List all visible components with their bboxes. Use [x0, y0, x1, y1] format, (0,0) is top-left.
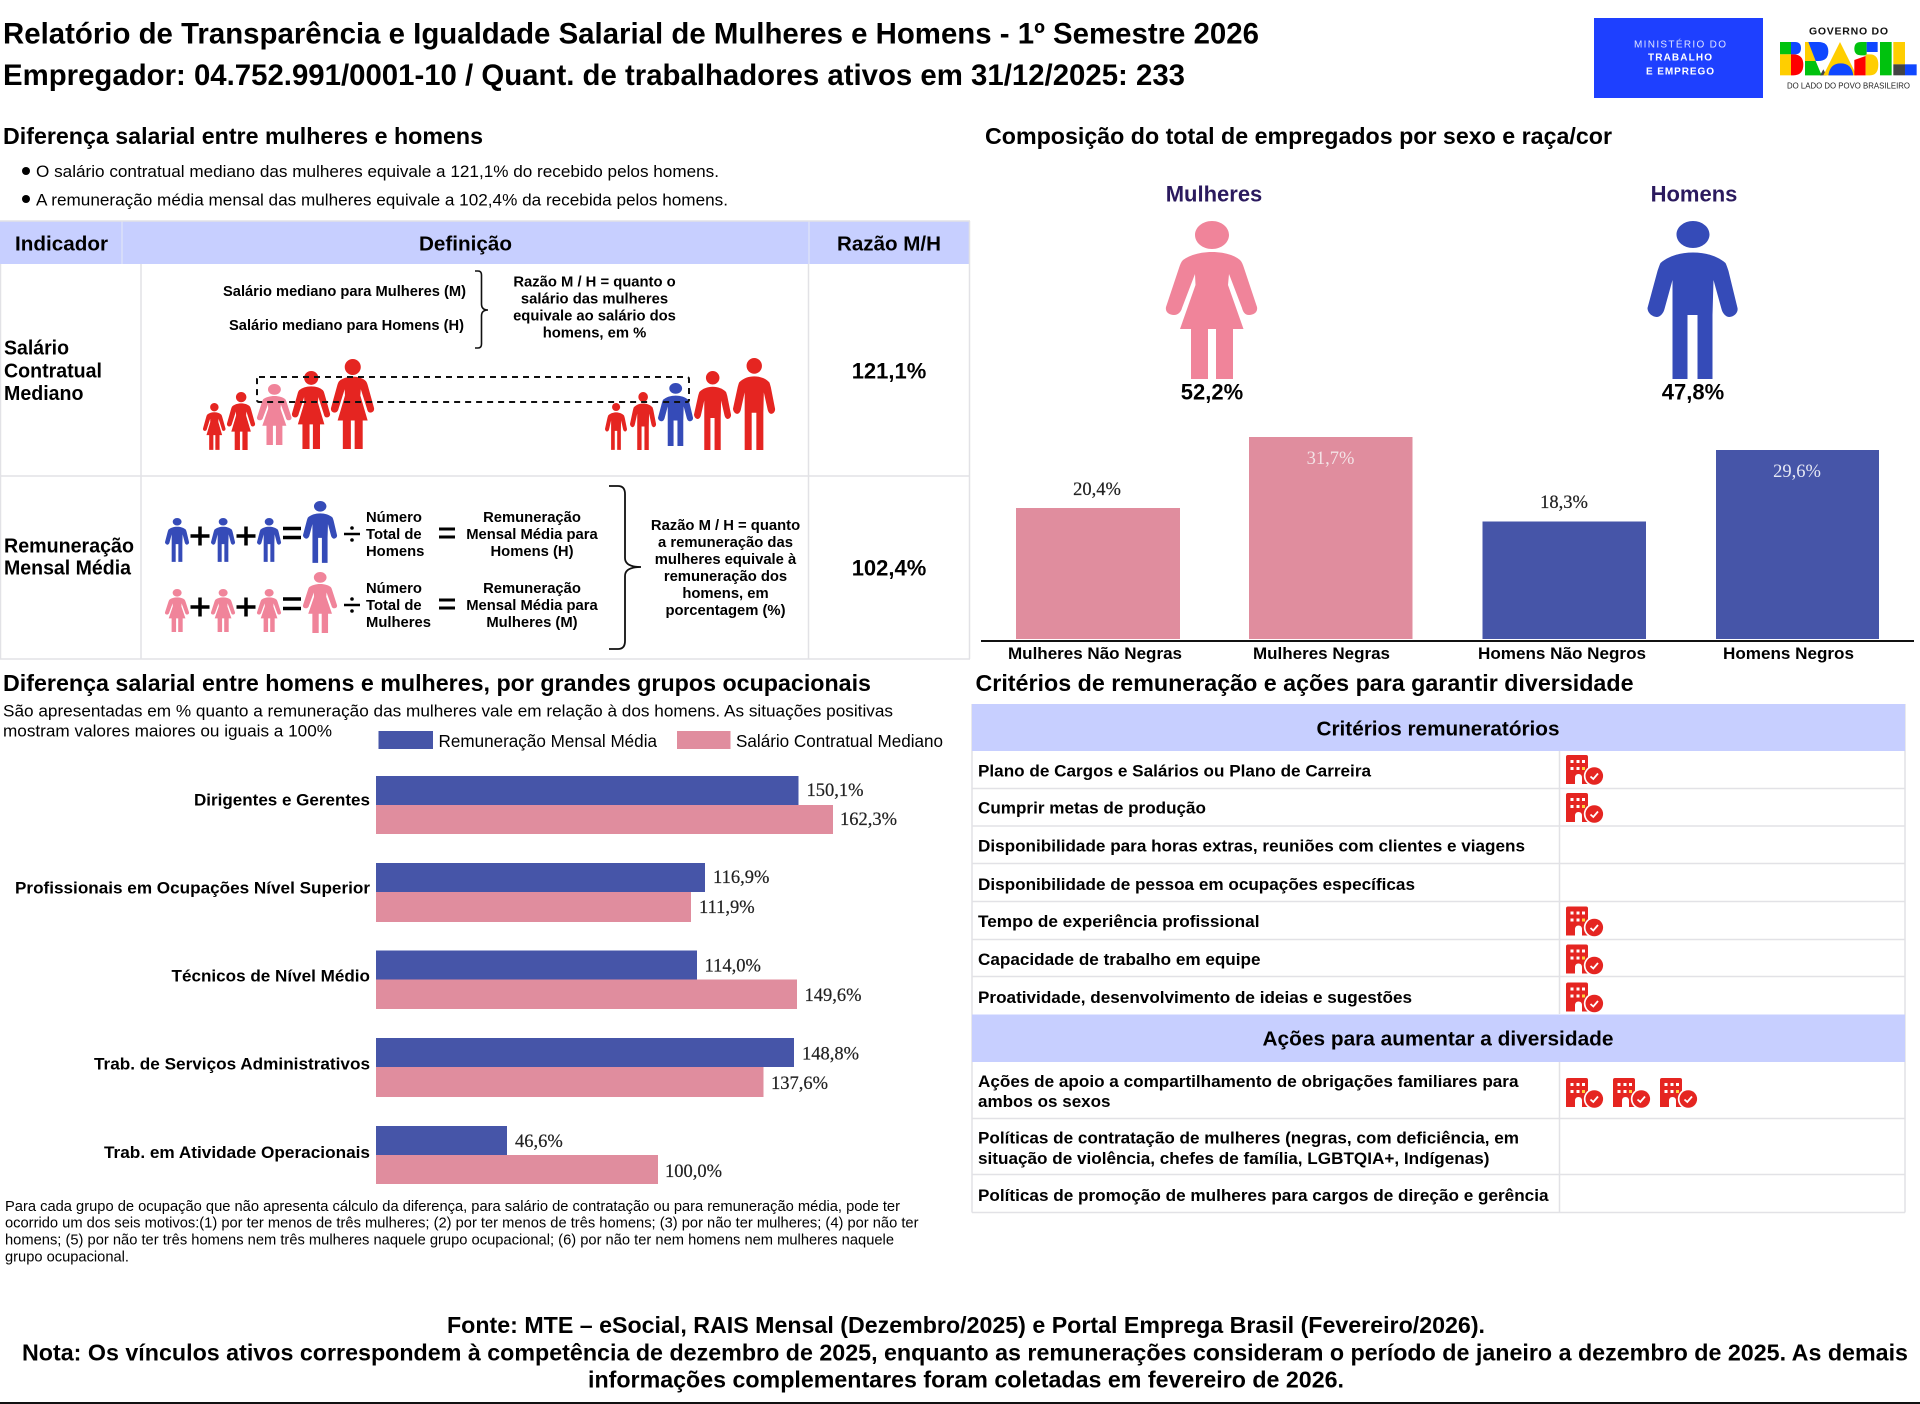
bar chart: sexo e raça/cor: 29,6%: [1773, 462, 1821, 482]
icons: homens por salário: [605, 358, 775, 450]
row: remuneração mensal média: 102,4%: [852, 556, 926, 580]
bullet list: O salário contratual mediano das mulheres equivale a 121,1% do recebido pelos homens.: [36, 162, 719, 181]
row: salário contratual mediano: [4, 271, 926, 450]
row: salário contratual mediano: Contratual: [4, 360, 102, 382]
logo: Governo do Brasil: GOVERNO DO: [1809, 26, 1888, 38]
formula: homens: Homens (H): [490, 544, 574, 560]
rows: ações: ambos os sexos: [978, 1092, 1110, 1111]
grupo: atividade operacional: 46,6%: [515, 1132, 563, 1152]
bar chart: sexo e raça/cor: 20,4%: [1073, 480, 1121, 500]
row: salário contratual mediano: Salário mediano para Homens (H): [229, 318, 464, 334]
row: salário contratual mediano: Salário: [4, 336, 69, 360]
rows: critérios: Disponibilidade para horas extras, reuniões com clientes e viagens: [978, 836, 1525, 856]
grupo: profissionais: 116,9%: [713, 868, 769, 888]
row: remuneração mensal média: [4, 486, 926, 649]
formula: homens: Remuneração: [483, 510, 581, 526]
formula: homens: [165, 501, 599, 563]
grupo: atividade operacional: 100,0%: [665, 1162, 722, 1182]
rows: critérios: [978, 762, 1525, 1007]
grupo: técnicos: 149,6%: [804, 986, 862, 1006]
rows: ações: situação de violência, chefes de família, LGBTQIA+, Indígenas): [978, 1149, 1490, 1168]
panel: homens total: [1648, 182, 1738, 404]
bar chart: sexo e raça/cor: 18,3%: [1540, 493, 1588, 513]
row: remuneração mensal média: porcentagem (%): [665, 603, 786, 619]
footnote: grupo ocupacional.: [5, 1248, 129, 1266]
logo: Ministério do Trabalho e Emprego: MINISTÉRIO DO: [1634, 38, 1726, 50]
heading: composição: Composição do total de empregados por sexo e raça/cor: [985, 123, 1612, 149]
text: explicação do gráfico: [3, 702, 893, 740]
panel: tabela de indicadores: [0, 221, 970, 659]
icons: ações: [1566, 1078, 1699, 1110]
grupo: profissionais: [15, 863, 769, 922]
rows: critérios: Plano de Cargos e Salários ou Plano de Carreira: [978, 762, 1372, 780]
rows: ações: Políticas de contratação de mulheres (negras, com deficiência, em: [978, 1128, 1519, 1148]
grupo: serviços administrativos: Trab. de Serviços Administrativos: [94, 1054, 370, 1074]
icons: critérios: [1566, 755, 1605, 1014]
grupo: atividade operacional: Trab. em Atividade Operacionais: [104, 1143, 370, 1162]
grupo: profissionais: 111,9%: [699, 898, 755, 918]
header: ações: Ações para aumentar a diversidade: [1262, 1028, 1614, 1050]
rows: critérios: Capacidade de trabalho em equipe: [978, 950, 1260, 969]
table header: Definição: [419, 232, 512, 256]
formula: mulheres: Mensal Média para: [466, 598, 599, 614]
formula: homens: Mensal Média para: [466, 527, 599, 543]
grupo: dirigentes: Dirigentes e Gerentes: [194, 790, 370, 810]
table header: [0, 221, 969, 264]
formula: mulheres: Total de: [366, 598, 422, 614]
title: Relatório de Transparência e Igualdade Salarial de Mulheres e Homens - 1º Semestre 2026: [3, 18, 1259, 50]
footer: fonte e nota: Nota: Os vínculos ativos correspondem à competência de dezembro de 2025, enquanto as remunerações consideram o período de janeiro a dezembro de 2025. As demais: [22, 1340, 1908, 1366]
formula: homens: Número: [366, 510, 422, 526]
title: Empregador: 04.752.991/0001-10 / Quant. de trabalhadores ativos em 31/12/2025: 233: [3, 59, 1185, 92]
bar chart: sexo e raça/cor: Homens Negros: [1723, 644, 1854, 663]
heading: diferença por grupos ocupacionais: Diferença salarial entre homens e mulheres, por grandes grupos ocupacionais: [3, 670, 871, 696]
rows: critérios: Proatividade, desenvolvimento de ideias e sugestões: [978, 988, 1412, 1007]
logo: Ministério do Trabalho e Emprego: [1594, 18, 1763, 98]
panel: mulheres total: 52,2%: [1181, 380, 1243, 404]
row: remuneração mensal média: Razão M / H = quanto: [651, 518, 800, 534]
row: salário contratual mediano: Razão M / H = quanto o: [513, 274, 676, 290]
row: remuneração mensal média: Remuneração: [4, 534, 134, 558]
row: remuneração mensal média: homens, em: [682, 586, 769, 602]
formula: mulheres: Remuneração: [483, 581, 581, 597]
header: critérios remuneratórios: Critérios remuneratórios: [1316, 718, 1560, 740]
rows: critérios: Cumprir metas de produção: [978, 798, 1206, 818]
text: explicação do gráfico: São apresentadas em % quanto a remuneração das mulheres vale em relação à dos homens. As situações positivas: [3, 702, 893, 720]
header: critérios remuneratórios: [972, 704, 1905, 751]
formula: mulheres: Mulheres (M): [486, 615, 578, 631]
logo: Ministério do Trabalho e Emprego: TRABALHO: [1648, 52, 1712, 64]
bar chart: sexo e raça/cor: Homens Não Negros: [1478, 644, 1646, 663]
row: remuneração mensal média: mulheres equivale à: [655, 552, 797, 568]
rows: ações: [978, 1072, 1549, 1205]
panel: homens total: 47,8%: [1662, 380, 1724, 404]
logo: Governo do Brasil: DO LADO DO POVO BRASILEIRO: [1787, 80, 1910, 90]
table header: Razão M/H: [837, 232, 941, 256]
footnote: ocorrido um dos seis motivos:(1) por ter menos de três mulheres; (2) por ter menos de três homens; (3) por não ter mulheres; (4) por não ter: [5, 1214, 918, 1232]
grupo: profissionais: Profissionais em Ocupações Nível Superior: [15, 878, 370, 898]
heading: critérios: Critérios de remuneração e ações para garantir diversidade: [976, 670, 1634, 696]
rows: critérios: Disponibilidade de pessoa em ocupações específicas: [978, 875, 1415, 894]
row: salário contratual mediano: 121,1%: [852, 358, 926, 384]
panel: mulheres total: [1166, 182, 1262, 404]
panel: mulheres total: Mulheres: [1166, 182, 1262, 206]
bar chart: grupos ocupacionais: [15, 776, 897, 1184]
text: explicação do gráfico: mostram valores maiores ou iguais a 100%: [3, 722, 332, 740]
footer: fonte e nota: informações complementares foram coletadas em fevereiro de 2026.: [588, 1366, 1344, 1392]
rows: ações: Ações de apoio a compartilhamento de obrigações familiares para: [978, 1072, 1519, 1091]
footnote: [5, 1198, 918, 1266]
footnote: Para cada grupo de ocupação que não apresenta cálculo da diferença, para salário de contratação ou para remuneração média, pode ter: [5, 1198, 900, 1215]
row: remuneração mensal média: a remuneração das: [658, 535, 793, 551]
title: [3, 18, 1259, 92]
formula: homens: Homens: [366, 544, 424, 560]
grupo: dirigentes: [194, 776, 897, 834]
grupo: técnicos: Técnicos de Nível Médio: [172, 966, 370, 986]
icons: mulheres por salário: [203, 359, 374, 450]
bullet list: A remuneração média mensal das mulheres equivale a 102,4% da recebida pelos homens.: [36, 190, 728, 210]
bar chart: sexo e raça/cor: Mulheres Não Negras: [1008, 644, 1182, 663]
logo: Ministério do Trabalho e Emprego: E EMPREGO: [1646, 66, 1714, 78]
footnote: homens; (5) por não ter três homens nem três mulheres naquele grupo ocupacional; (6) por não ter nem homens nem mulheres naquele: [5, 1232, 894, 1248]
bar chart: sexo e raça/cor: Mulheres Negras: [1253, 644, 1390, 663]
grupo: atividade operacional: [104, 1126, 722, 1184]
heading: diferença salarial: Diferença salarial entre mulheres e homens: [3, 123, 483, 149]
legend: [378, 731, 943, 751]
grupo: técnicos: [172, 950, 862, 1009]
grupo: serviços administrativos: 148,8%: [802, 1044, 859, 1064]
formula: mulheres: Mulheres: [366, 615, 431, 631]
rows: ações: Políticas de promoção de mulheres para cargos de direção e gerência: [978, 1186, 1549, 1205]
legend: Salário Contratual Mediano: [736, 731, 943, 751]
footer: fonte e nota: [22, 1312, 1908, 1392]
row: salário contratual mediano: Salário mediano para Mulheres (M): [223, 284, 466, 300]
panel: critérios e ações: [972, 704, 1905, 1212]
row: salário contratual mediano: Mediano: [4, 382, 84, 405]
grupo: dirigentes: 150,1%: [806, 781, 864, 801]
header: ações: [972, 1014, 1905, 1062]
grupo: técnicos: 114,0%: [704, 956, 761, 976]
bullet list: [22, 162, 728, 210]
bar chart: sexo e raça/cor: [981, 437, 1914, 663]
grupo: dirigentes: 162,3%: [840, 810, 897, 830]
table header: Indicador: [15, 232, 108, 256]
formula: mulheres: Número: [366, 581, 422, 597]
row: salário contratual mediano: equivale ao salário dos: [513, 308, 676, 324]
logo: Governo do Brasil: [1780, 26, 1917, 90]
bar chart: sexo e raça/cor: 31,7%: [1307, 449, 1354, 469]
rows: critérios: Tempo de experiência profissional: [978, 912, 1260, 931]
row: remuneração mensal média: Mensal Média: [4, 556, 132, 580]
row: salário contratual mediano: homens, em %: [543, 326, 646, 342]
legend: Remuneração Mensal Média: [438, 731, 657, 751]
formula: homens: Total de: [366, 527, 422, 543]
row: remuneração mensal média: remuneração dos: [664, 569, 787, 585]
panel: homens total: Homens: [1651, 182, 1737, 206]
grupo: serviços administrativos: [94, 1038, 859, 1097]
row: salário contratual mediano: salário das mulheres: [521, 292, 668, 308]
footer: fonte e nota: Fonte: MTE – eSocial, RAIS Mensal (Dezembro/2025) e Portal Emprega Brasil (Fevereiro/2026).: [447, 1312, 1485, 1338]
formula: mulheres: [165, 572, 599, 633]
grupo: serviços administrativos: 137,6%: [771, 1074, 828, 1094]
